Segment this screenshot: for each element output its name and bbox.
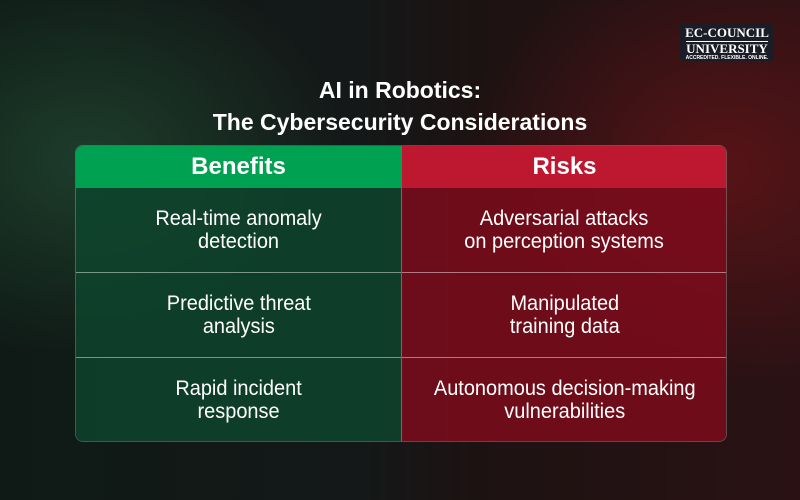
benefit 3 [175, 377, 302, 423]
risk 2: training data [510, 315, 619, 338]
benefit 3: Rapid incident [175, 377, 302, 400]
benefit 3: response [197, 400, 280, 423]
benefit 2: analysis [202, 315, 275, 338]
logo: ACCREDITED. FLEXIBLE. ONLINE. [686, 55, 768, 61]
risk 1: on perception systems [465, 230, 664, 253]
heading: benefits: Benefits [191, 153, 286, 180]
risk 2 [402, 273, 727, 358]
risk 3: vulnerabilities [504, 400, 625, 423]
risk 3: Autonomous decision-making [434, 377, 695, 400]
benefit 1: Real-time anomaly [155, 207, 322, 230]
title: The Cybersecurity Considerations [213, 109, 587, 135]
comparison table [75, 145, 727, 442]
benefit 2: Predictive threat [166, 292, 311, 315]
logo [680, 23, 774, 61]
heading: benefits [76, 146, 401, 188]
risk 1: Adversarial attacks [480, 207, 649, 230]
title [213, 77, 587, 135]
title: AI in Robotics: [319, 77, 481, 103]
benefit 1 [76, 188, 401, 273]
benefit 2 [76, 273, 401, 358]
heading: risks: Risks [532, 153, 597, 180]
logo: UNIVERSITY [686, 41, 768, 56]
logo: EC-COUNCIL [685, 25, 769, 40]
risk 3 [434, 377, 695, 423]
risk 1 [402, 188, 727, 273]
panel: benefits [76, 146, 401, 441]
heading: risks [402, 146, 727, 188]
panel: risks [401, 146, 727, 441]
benefit 1: detection [198, 230, 279, 253]
risk 2: Manipulated [510, 292, 619, 315]
